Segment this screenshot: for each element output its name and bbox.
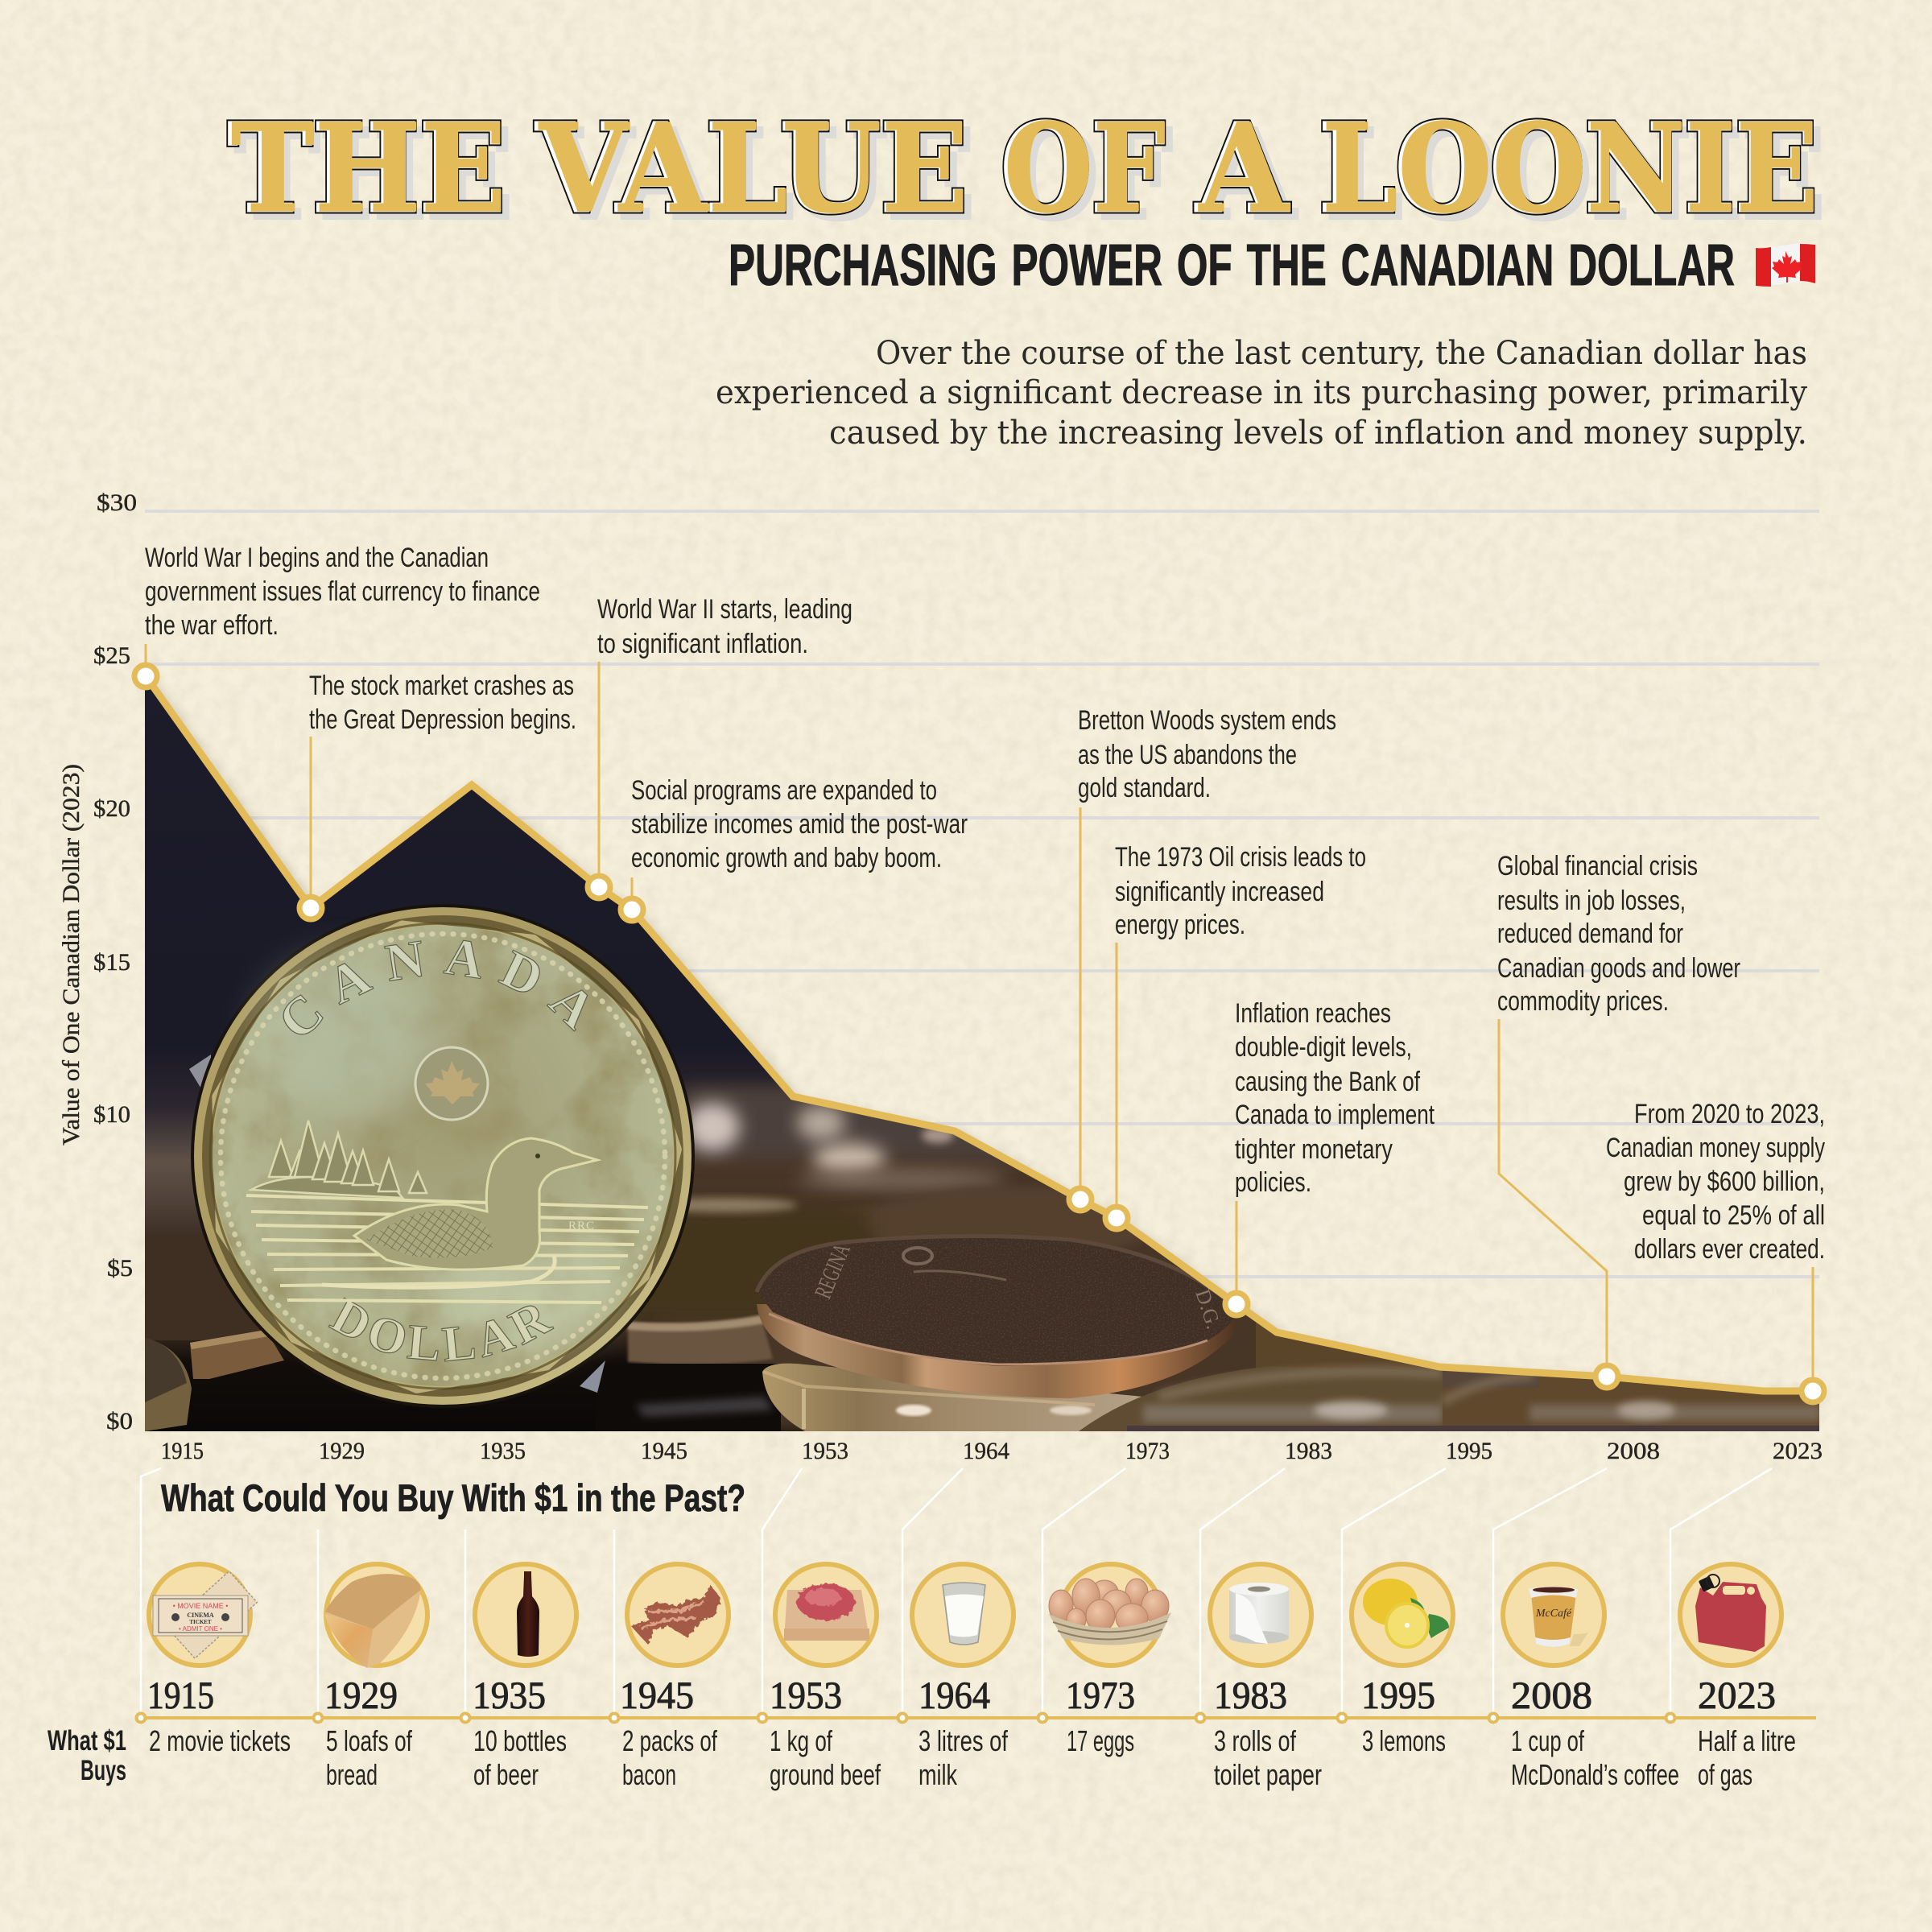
item 1945: packs of bacon: 2 packs of xyxy=(622,1724,718,1757)
icon: McCafe cup: McCafé xyxy=(1535,1608,1572,1620)
annotation: financial crisis: reduced demand for xyxy=(1497,919,1683,949)
x axis labels: 1935 xyxy=(480,1438,526,1464)
annotation: inflation double digit: tighter monetary xyxy=(1235,1134,1393,1165)
main loonie coin: DOLLAR xyxy=(328,1298,554,1362)
annotation: social programs: stabilize incomes amid the post-war xyxy=(631,809,968,840)
y axis labels xyxy=(93,489,137,1435)
copper coin stack: D.G. xyxy=(1191,1286,1225,1331)
x axis labels: 1973 xyxy=(1125,1438,1170,1464)
item 1935: bottles of beer xyxy=(473,1564,576,1791)
annotation: inflation double digit: Inflation reaches xyxy=(1235,998,1391,1029)
photo: stacked coins clipped under the curve xyxy=(145,689,1819,1431)
coin trees xyxy=(251,1121,427,1198)
annotation: world war II xyxy=(588,594,852,898)
title: THE xyxy=(228,97,506,240)
annotation: financial crisis: Global financial crisis xyxy=(1497,851,1698,881)
background blurred coins xyxy=(145,1087,1352,1433)
item 1935: bottles of beer: 10 bottles xyxy=(473,1724,567,1757)
item 1964: litres of milk xyxy=(912,1564,1013,1791)
title: LOONIE xyxy=(1326,103,1825,246)
coin water lines xyxy=(246,1195,648,1302)
y axis labels: $0 xyxy=(106,1408,133,1435)
right blurred coins xyxy=(1079,1320,1821,1433)
item 1995: lemons: 1995 xyxy=(1361,1674,1435,1717)
section heading: What Could You Buy With $1 in the Past? xyxy=(161,1476,745,1519)
item 1973: eggs xyxy=(1049,1564,1171,1757)
item 1953: ground beef xyxy=(770,1564,881,1791)
item 2008: coffee xyxy=(1503,1564,1679,1791)
y axis labels: $25 xyxy=(93,642,130,669)
annotation: inflation double digit: double-digit levels, xyxy=(1235,1032,1412,1063)
annotation: oil crisis: energy prices. xyxy=(1115,910,1245,940)
item 1945: packs of bacon: 1945 xyxy=(620,1674,694,1717)
title: THE xyxy=(235,103,513,246)
intro paragraph: caused by the increasing levels of inflation and money supply. xyxy=(829,415,1807,452)
annotation: social programs: economic growth and baby boom. xyxy=(631,843,942,873)
item 1929: loaves of bread: 5 loafs of xyxy=(326,1724,413,1757)
annotation: bretton woods: gold standard. xyxy=(1078,773,1211,803)
annotation: financial crisis: results in job losses, xyxy=(1497,886,1686,916)
annotation: oil crisis xyxy=(1105,842,1366,1229)
title: LOONIE xyxy=(1322,97,1818,240)
y axis labels: $20 xyxy=(93,795,130,822)
title: OF xyxy=(1008,103,1172,246)
item 2008: coffee: 2008 xyxy=(1511,1674,1592,1717)
title: THE xyxy=(231,97,506,240)
annotation: financial crisis: commodity prices. xyxy=(1497,986,1669,1017)
annotation: 1929 crash: The stock market crashes as xyxy=(309,671,574,701)
annotation: money supply: equal to 25% of all xyxy=(1642,1200,1825,1231)
title: A xyxy=(1202,103,1297,246)
item 1964: litres of milk: 1964 xyxy=(919,1674,990,1717)
x axis labels: 1953 xyxy=(802,1438,848,1464)
icon: tickets xyxy=(153,1571,257,1658)
icon: glass of milk xyxy=(943,1583,985,1645)
annotation: 1915 world war I: government issues flat currency to finance xyxy=(145,576,540,607)
item 2008: coffee: McDonald’s coffee xyxy=(1511,1758,1679,1791)
coin sun with maple leaf xyxy=(415,1047,488,1120)
intro paragraph xyxy=(716,335,1807,452)
annotation: world war II: to significant inflation. xyxy=(597,629,808,659)
icon: beer bottle xyxy=(517,1571,539,1657)
item 1973: eggs: 1973 xyxy=(1066,1674,1135,1717)
annotation: social programs: Social programs are expanded to xyxy=(631,775,937,806)
icon: ground beef on board xyxy=(784,1583,869,1641)
row label: what $1 buys xyxy=(47,1725,126,1786)
y axis labels: $10 xyxy=(93,1101,130,1128)
annotation: 1929 crash xyxy=(299,671,576,919)
icon: bacon xyxy=(631,1584,720,1645)
annotation: 1915 world war I xyxy=(134,543,540,687)
item 1953: ground beef: 1953 xyxy=(770,1674,842,1717)
x axis labels: 2008 xyxy=(1607,1438,1660,1464)
icon: McCafe cup xyxy=(1529,1587,1590,1647)
y axis labels: $30 xyxy=(97,489,137,516)
intro paragraph: Over the course of the last century, the Canadian dollar has xyxy=(876,335,1807,372)
item 1915: movie tickets: 2 movie tickets xyxy=(149,1724,291,1757)
item 1983: toilet paper xyxy=(1210,1564,1322,1791)
title: OF xyxy=(1001,97,1165,240)
annotation: world war II: World War II starts, leading xyxy=(597,594,852,625)
annotation: inflation double digit: policies. xyxy=(1235,1167,1311,1198)
copper coin stack xyxy=(749,1232,1248,1431)
main loonie coin: RRC xyxy=(568,1220,595,1232)
title: VALUE xyxy=(543,103,975,246)
main loonie coin xyxy=(189,904,695,1408)
annotation: money supply: Canadian money supply xyxy=(1606,1133,1825,1163)
title: THE xyxy=(228,97,506,240)
y axis labels: $5 xyxy=(107,1255,133,1282)
intro paragraph: experienced a significant decrease in its purchasing power, primarily xyxy=(716,374,1807,411)
value curve xyxy=(146,676,1813,1391)
annotation: 1915 world war I: the war effort. xyxy=(145,610,279,641)
title: A xyxy=(1198,97,1290,240)
annotation: money supply: dollars ever created. xyxy=(1634,1234,1825,1265)
title xyxy=(228,97,1825,246)
item 2023: half a litre of gas xyxy=(1680,1564,1796,1791)
row label: what $1 buys: What $1 xyxy=(47,1725,126,1757)
x axis labels: 2023 xyxy=(1773,1438,1823,1464)
item 1973: eggs: 17 eggs xyxy=(1067,1724,1134,1757)
item 1953: ground beef: 1 kg of xyxy=(770,1724,833,1757)
title: LOONIE xyxy=(1319,97,1818,240)
annotation: 1929 crash: the Great Depression begins. xyxy=(309,704,576,735)
coin lettering: CANADA xyxy=(283,940,588,1035)
copper coin stack: REGINA xyxy=(810,1240,856,1302)
line shadow xyxy=(150,683,1821,1397)
title: A xyxy=(1195,97,1290,240)
annotation: oil crisis: significantly increased xyxy=(1115,877,1324,907)
annotation: money supply xyxy=(1606,1099,1825,1402)
icon: basket of eggs xyxy=(1049,1579,1171,1645)
x axis labels xyxy=(161,1438,1823,1464)
icon: toilet roll xyxy=(1229,1583,1289,1644)
row label: what $1 buys: Buys xyxy=(80,1755,126,1786)
item 1983: toilet paper: toilet paper xyxy=(1214,1758,1322,1791)
annotation: financial crisis xyxy=(1497,851,1740,1388)
item 1929: loaves of bread: bread xyxy=(326,1758,378,1791)
item 1929: loaves of bread xyxy=(324,1564,427,1791)
title: OF xyxy=(1004,97,1166,240)
item 1964: litres of milk: milk xyxy=(919,1758,958,1791)
item 1995: lemons: 3 lemons xyxy=(1362,1724,1446,1757)
title: OF xyxy=(1001,97,1165,240)
annotation: money supply: From 2020 to 2023, xyxy=(1634,1099,1825,1129)
item 2023: half a litre of gas: of gas xyxy=(1698,1758,1752,1791)
annotation: inflation double digit xyxy=(1225,998,1435,1315)
x axis labels: 1995 xyxy=(1446,1438,1492,1464)
annotation: bretton woods: Bretton Woods system ends xyxy=(1078,705,1336,736)
icon: bread xyxy=(324,1574,421,1668)
x axis labels: 1945 xyxy=(641,1438,687,1464)
annotation: inflation double digit: Canada to implement xyxy=(1235,1100,1435,1130)
item 1915: movie tickets: 1915 xyxy=(147,1674,214,1717)
item 2008: coffee: 1 cup of xyxy=(1511,1724,1585,1757)
y axis title: Value of One Canadian Dollar (2023) xyxy=(58,764,85,1146)
item 2023: half a litre of gas: Half a litre xyxy=(1698,1724,1796,1757)
item 1945: packs of bacon xyxy=(620,1564,729,1791)
icon: tickets: TICKET xyxy=(189,1619,212,1625)
item 1964: litres of milk: 3 litres of xyxy=(919,1724,1009,1757)
timeline axis xyxy=(137,1713,1816,1723)
title: LOONIE xyxy=(1319,97,1818,240)
annotation: 1915 world war I: World War I begins and the Canadian xyxy=(145,543,489,573)
annotation: bretton woods xyxy=(1069,705,1336,1211)
item 1983: toilet paper: 1983 xyxy=(1214,1674,1287,1717)
annotation: oil crisis: The 1973 Oil crisis leads to xyxy=(1115,842,1366,873)
icon: tickets: • MOVIE NAME • xyxy=(173,1602,228,1610)
title: VALUE xyxy=(535,97,968,240)
x axis labels: 1929 xyxy=(319,1438,365,1464)
coin loon xyxy=(322,1138,597,1287)
icon: tickets: CINEMA xyxy=(187,1612,214,1619)
icon: gas can xyxy=(1695,1575,1766,1652)
annotation: social programs xyxy=(621,775,968,921)
item 1945: packs of bacon: bacon xyxy=(622,1758,676,1791)
item 1983: toilet paper: 3 rolls of xyxy=(1214,1724,1297,1757)
item 2023: half a litre of gas: 2023 xyxy=(1698,1674,1776,1717)
item 1915: movie tickets xyxy=(147,1564,291,1757)
y axis labels: $15 xyxy=(93,949,130,976)
annotation: financial crisis: Canadian goods and lower xyxy=(1497,953,1740,984)
item 1935: bottles of beer: 1935 xyxy=(473,1674,546,1717)
title: VALUE xyxy=(535,97,968,240)
item 1995: lemons xyxy=(1352,1564,1453,1757)
item 1935: bottles of beer: of beer xyxy=(473,1758,539,1791)
x axis labels: 1983 xyxy=(1285,1438,1332,1464)
x axis labels: 1964 xyxy=(963,1438,1009,1464)
item 1929: loaves of bread: 1929 xyxy=(324,1674,398,1717)
annotation: bretton woods: as the US abandons the xyxy=(1078,740,1297,770)
icon: tickets: • ADMIT ONE • xyxy=(179,1625,222,1633)
item 1953: ground beef: ground beef xyxy=(770,1758,881,1791)
annotation: inflation double digit: causing the Bank of xyxy=(1235,1067,1420,1097)
title: A xyxy=(1195,97,1290,240)
title: VALUE xyxy=(539,97,968,240)
icon: lemons xyxy=(1363,1579,1449,1647)
x axis labels: 1915 xyxy=(161,1438,204,1464)
annotation: money supply: grew by $600 billion, xyxy=(1624,1166,1825,1197)
icon: Canadian flag xyxy=(1756,243,1815,287)
